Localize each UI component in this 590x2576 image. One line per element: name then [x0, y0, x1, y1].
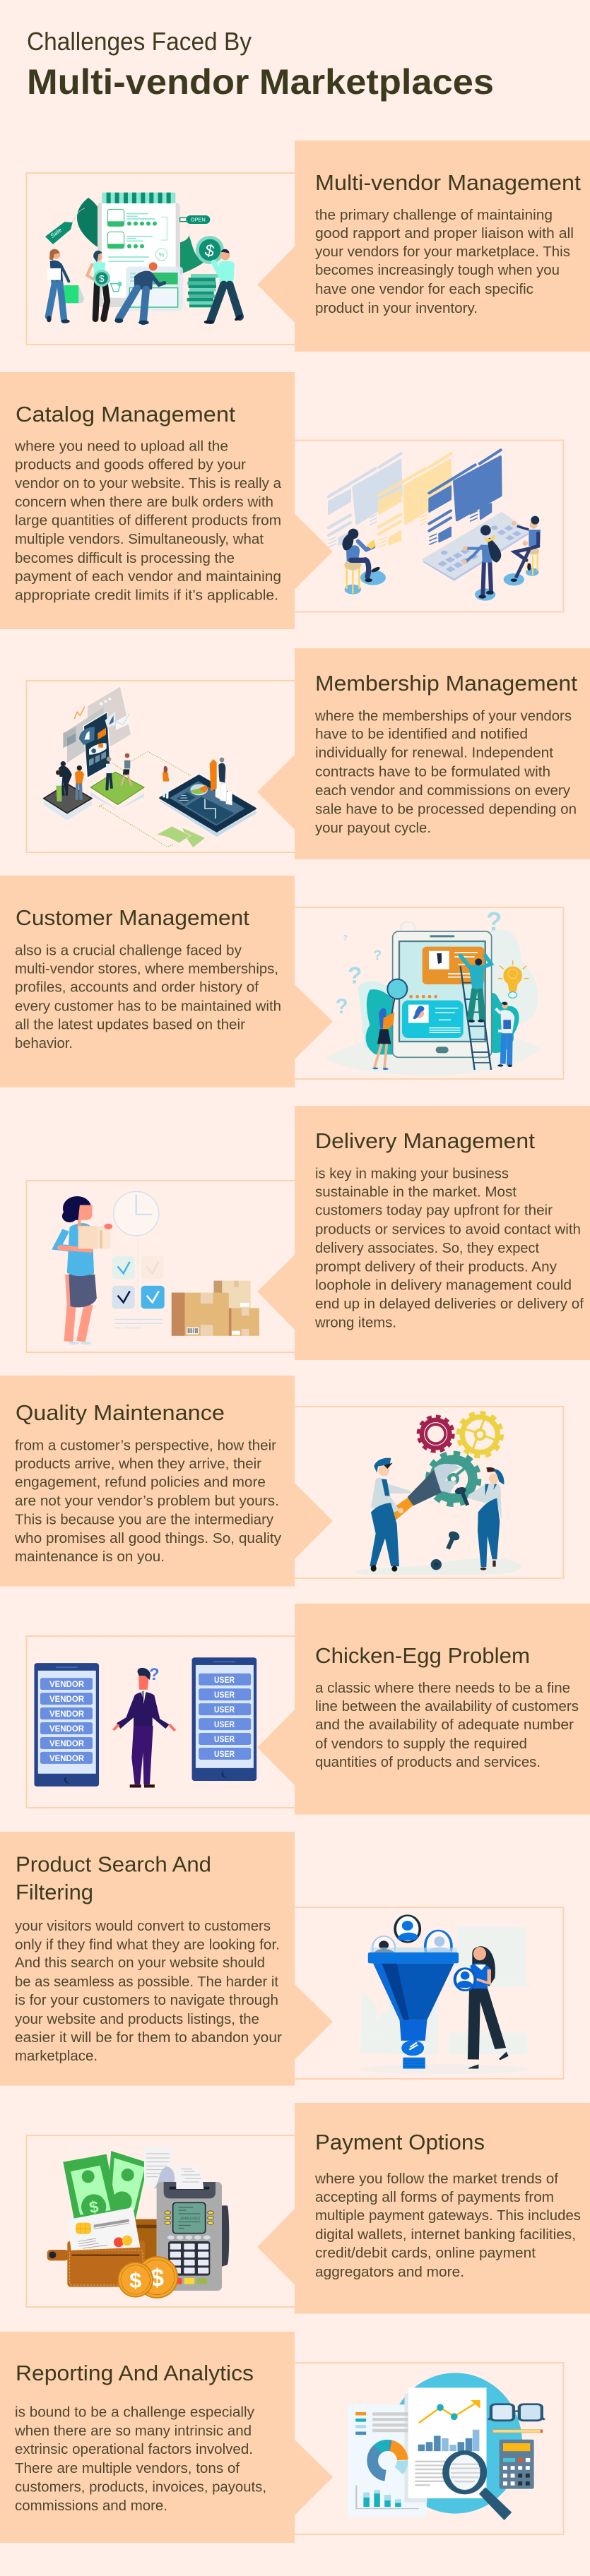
body text: engagement, refund policies and more: [15, 1474, 266, 1490]
body text: becomes difficult is processing the: [15, 550, 235, 566]
body text: each vendor and commissions on every: [315, 782, 571, 799]
body text: the primary challenge of maintaining: [315, 207, 553, 223]
line chart: [419, 2402, 478, 2423]
coins: [136, 2257, 177, 2298]
illustration: storefront with shoppers: OPEN: [191, 217, 206, 222]
image frame: [288, 907, 564, 1079]
body text: [315, 207, 574, 316]
donut chart: [372, 2445, 403, 2476]
heading: Customer Management: [16, 905, 249, 930]
section: quality maintenance: [0, 1376, 564, 1586]
title: [27, 27, 494, 102]
vendor labels: VENDOR: [49, 1724, 84, 1734]
body text: prompt delivery of their products. Any: [315, 1259, 557, 1275]
image frame: [27, 1181, 302, 1352]
body text: your payout cycle.: [315, 820, 431, 836]
body text: And this search on your website should: [15, 1955, 265, 1971]
left seated person: [360, 570, 386, 585]
question marks: ?: [336, 995, 348, 1018]
heading: Multi-vendor Management: [315, 170, 581, 195]
illustration: wallet, cash, card terminal: $: [151, 2264, 164, 2291]
green platform: [90, 792, 144, 810]
illustration: vendor phone, thinking man, user phone: [34, 1657, 256, 1788]
gears: [423, 1421, 448, 1446]
body text: appropriate credit limits if it’s applicable.: [15, 588, 278, 604]
heading: Quality Maintenance: [16, 1400, 225, 1425]
user labels: [214, 1675, 235, 1759]
body text: where the memberships of your vendors: [314, 708, 572, 724]
calculator: [500, 2440, 534, 2489]
body text: [14, 1438, 282, 1565]
body text: customers, products, invoices, payouts,: [15, 2479, 266, 2496]
phone: [83, 712, 110, 778]
body text: every customer has to be maintained with: [15, 998, 281, 1014]
user labels: USER: [214, 1705, 235, 1715]
illustration: wallet, cash, card terminal: $: [88, 2197, 100, 2217]
question marks: [336, 907, 502, 1018]
image frame: [27, 1636, 302, 1808]
illustration: reports, magnifier, calculator: [348, 2373, 545, 2520]
body text: This is because you are the intermediary: [15, 1511, 274, 1527]
illustration: storefront with shoppers: $: [99, 273, 105, 284]
body text: vendor on to your website. This is really a: [15, 475, 282, 491]
section: reporting and analytics: [0, 2332, 564, 2543]
body text: products arrive, when they arrive, their: [15, 1456, 261, 1472]
title: Multi-vendor Marketplaces: [27, 62, 494, 102]
user labels: USER: [214, 1749, 235, 1759]
woman with bag: [64, 285, 78, 303]
heading: Membership Management: [315, 671, 577, 696]
body text: is for your customers to navigate through: [15, 1992, 278, 2008]
user labels: USER: [214, 1690, 235, 1700]
ladder: [461, 966, 491, 1070]
question marks: ?: [343, 934, 348, 943]
body text: your visitors would convert to customers: [15, 1918, 271, 1934]
body text: all the latest updates based on their: [15, 1016, 245, 1032]
section: delivery management: [27, 1106, 590, 1360]
column chart: [418, 2430, 479, 2451]
body text: [315, 1680, 579, 1770]
body text: large quantities of different products from: [15, 513, 281, 529]
woman with magnifier: [391, 999, 394, 1018]
man with folder: [502, 1003, 508, 1009]
body text: individually for renewal. Independent: [315, 744, 553, 761]
body text: quantities of products and services.: [315, 1754, 541, 1770]
body text: and the availability of adequate number: [315, 1717, 574, 1733]
question marks: ?: [373, 948, 382, 963]
body text: end up in delayed deliveries or delivery of: [315, 1296, 584, 1312]
vendor labels: VENDOR: [49, 1679, 84, 1689]
body text: [314, 708, 577, 836]
title: Challenges Faced By: [27, 27, 252, 56]
text panel with arrow: [257, 2103, 590, 2313]
body text: concern when there are bulk orders with: [15, 494, 273, 510]
image frame: [288, 441, 564, 612]
body text: where you follow the market trends of: [314, 2171, 558, 2187]
body text: commissions and more.: [15, 2498, 167, 2514]
body text: maintenance is on you.: [15, 1549, 165, 1565]
illustration: storefront with shoppers: $: [203, 241, 216, 261]
body text: payment of each vendor and maintaining: [15, 568, 281, 585]
big coin: [196, 236, 224, 264]
text panel with arrow: [0, 1376, 333, 1586]
image frame: [288, 2363, 564, 2534]
speech bubbles: [182, 828, 205, 847]
illustration: isometric mobile platforms: [44, 687, 256, 847]
illustration: wallet, cash, card terminal: APPROVED: [180, 2217, 200, 2221]
illustration: storefront with shoppers: [45, 193, 243, 325]
body text: There are multiple vendors, tons of: [15, 2460, 240, 2476]
body text: profiles, accounts and order history of: [15, 979, 259, 995]
light bulb: [503, 966, 522, 985]
growth bars and arrow: [216, 775, 232, 805]
body text: good rapport and proper liaison with all: [315, 225, 574, 242]
left worker: [378, 1465, 389, 1476]
body text: have to be identified and notified: [315, 726, 528, 742]
section: customer management: [0, 876, 564, 1087]
illustration: woman with parcels and checklist: [57, 1191, 259, 1344]
body text: extrinsic operational factors involved.: [15, 2441, 253, 2457]
text panel with arrow: [0, 1832, 333, 2086]
heading: Reporting And Analytics: [16, 2361, 254, 2385]
body text: be as seamless as possible. The harder it: [15, 1974, 278, 1990]
illustration: funnel with woman: [360, 1916, 530, 2074]
illustration: wallet, cash, card terminal: $: [129, 2268, 141, 2292]
man pushing: [149, 262, 158, 270]
body text: also is a crucial challenge faced by: [15, 942, 242, 959]
vendor labels: [49, 1679, 84, 1763]
body text: of vendors to supply the required: [315, 1736, 527, 1752]
body text: have one vendor for each specific: [315, 281, 533, 297]
body text: aggregators and more.: [315, 2264, 464, 2280]
small bar chart: [356, 2485, 419, 2509]
text panel with arrow: [257, 1604, 590, 1815]
text panel with arrow: [257, 141, 590, 352]
woman: [69, 1275, 88, 1342]
heading: Catalog Management: [16, 402, 235, 427]
body text: delivery associates. So, they expect: [315, 1240, 539, 1256]
funnel: [373, 1963, 454, 2020]
body text: digital wallets, internet banking facilities,: [315, 2226, 576, 2243]
coin stack: [187, 274, 218, 307]
illustration: storefront with shoppers: %: [159, 251, 165, 258]
body text: multiple payment gateways. This includes: [315, 2207, 581, 2224]
body text: [14, 2404, 266, 2514]
user labels: USER: [214, 1734, 235, 1744]
people: [61, 761, 66, 766]
right seated person: [504, 573, 524, 585]
heading: Product Search And: [16, 1852, 211, 1877]
parcels: [213, 1281, 251, 1309]
body text: loophole in delivery management could: [315, 1277, 572, 1294]
illustration: wallet, cash, card terminal: [47, 2147, 229, 2298]
heading: [16, 1852, 211, 1904]
body text: contracts have to be formulated with: [315, 763, 550, 780]
bolts: [457, 1488, 466, 1496]
body text: multiple vendors. Simultaneously, what: [15, 531, 264, 547]
section: chicken-egg problem: [27, 1604, 590, 1815]
body text: a classic where there needs to be a fine: [315, 1680, 570, 1696]
text panel with arrow: [0, 372, 333, 629]
body text: is key in making your business: [315, 1166, 509, 1182]
heading: Filtering: [16, 1880, 93, 1904]
woman: [472, 1946, 495, 1986]
body text: products and goods offered by your: [15, 457, 246, 473]
heading: Delivery Management: [315, 1128, 535, 1153]
text panel with arrow: [0, 876, 333, 1087]
body text: wrong items.: [314, 1315, 396, 1331]
body text: credit/debit cards, online payment: [315, 2245, 536, 2261]
standing person: [475, 588, 495, 601]
document lines: [415, 2462, 446, 2485]
image frame: [27, 681, 302, 852]
vendor labels: VENDOR: [49, 1694, 84, 1704]
vendor labels: VENDOR: [49, 1739, 84, 1748]
body text: becomes increasingly tough when you: [315, 262, 560, 278]
body text: customers today pay upfront for their: [315, 1202, 553, 1218]
body text: who promises all good things. So, quality: [14, 1530, 282, 1546]
body text: sale have to be processed depending on: [315, 801, 577, 818]
body text: [314, 1166, 584, 1331]
image frame: [27, 2135, 302, 2307]
body text: sustainable in the market. Most: [315, 1183, 517, 1200]
section: product search and filtering: [0, 1832, 564, 2086]
image frame: [27, 173, 302, 345]
man with coin: [220, 251, 230, 260]
user labels: USER: [214, 1719, 235, 1729]
payment terminal: [221, 2205, 229, 2267]
body text: [314, 2171, 581, 2280]
body text: multi-vendor stores, where memberships,: [15, 960, 278, 977]
image frame: [288, 1407, 564, 1578]
pencil: [493, 2430, 542, 2433]
body text: [14, 438, 282, 604]
thinking man: [117, 1692, 170, 1729]
body text: behavior.: [15, 1035, 73, 1051]
section: payment options: [27, 2103, 590, 2313]
illustration: workers with gears and wrench: [355, 1413, 521, 1575]
body text: easier it will be for them to abandon your: [15, 2029, 282, 2046]
person on ladder: [468, 965, 484, 989]
body text: where you need to upload all the: [14, 438, 228, 455]
wrench: [373, 1497, 413, 1532]
tablet platform: [160, 800, 256, 837]
illustration: tablet with customer profiles: [325, 907, 542, 1076]
image frame: [288, 1907, 564, 2079]
body text: marketplace.: [15, 2048, 98, 2064]
glasses: [491, 2404, 514, 2421]
grey platform: [44, 801, 92, 819]
user circles: [372, 1936, 395, 1959]
credit card: [67, 2207, 140, 2250]
dotted connectors: [99, 751, 191, 847]
question marks: ?: [348, 962, 362, 989]
woman with coin: [94, 252, 102, 261]
body text: [15, 942, 281, 1051]
illustration: storefront with shoppers: Sale: [49, 226, 63, 239]
wallet: [134, 2219, 157, 2260]
body text: accepting all forms of payments from: [315, 2189, 554, 2205]
illustration: isometric keyboard and screens: [329, 450, 541, 601]
question marks: ?: [486, 907, 502, 936]
banknotes: [106, 2151, 148, 2219]
receipts: [144, 2147, 177, 2189]
body text: line between the availability of customers: [315, 1698, 579, 1715]
body text: [15, 1918, 282, 2064]
text panel with arrow: [257, 648, 590, 859]
section: membership management: [27, 648, 590, 859]
heading: Payment Options: [315, 2130, 485, 2154]
body text: from a customer’s perspective, how their: [15, 1438, 276, 1453]
question mark: ?: [149, 1665, 160, 1684]
body text: your website and products listings, the: [15, 2011, 259, 2027]
body text: is bound to be a challenge especially: [15, 2404, 255, 2421]
section: multi-vendor management: [27, 141, 590, 352]
body text: only if they find what they are looking for.: [15, 1936, 280, 1952]
body text: when there are so many intrinsic and: [14, 2423, 252, 2439]
body text: your vendors for your marketplace. This: [315, 244, 570, 260]
heading: Chicken-Egg Problem: [315, 1643, 530, 1668]
text panel with arrow: [257, 1106, 590, 1360]
vendor labels: VENDOR: [49, 1753, 84, 1763]
section: catalog management: [0, 372, 564, 629]
text panel with arrow: [0, 2332, 333, 2543]
user labels: USER: [214, 1675, 235, 1685]
cart: [111, 284, 121, 292]
magnifying glass: [446, 2452, 483, 2492]
keyboard: [423, 515, 529, 581]
body text: are not your vendor’s problem but yours.: [15, 1493, 279, 1509]
body text: product in your inventory.: [315, 300, 478, 316]
right worker: [489, 1473, 499, 1484]
vendor labels: VENDOR: [49, 1709, 84, 1719]
body text: products or services to avoid contact with: [315, 1222, 581, 1238]
